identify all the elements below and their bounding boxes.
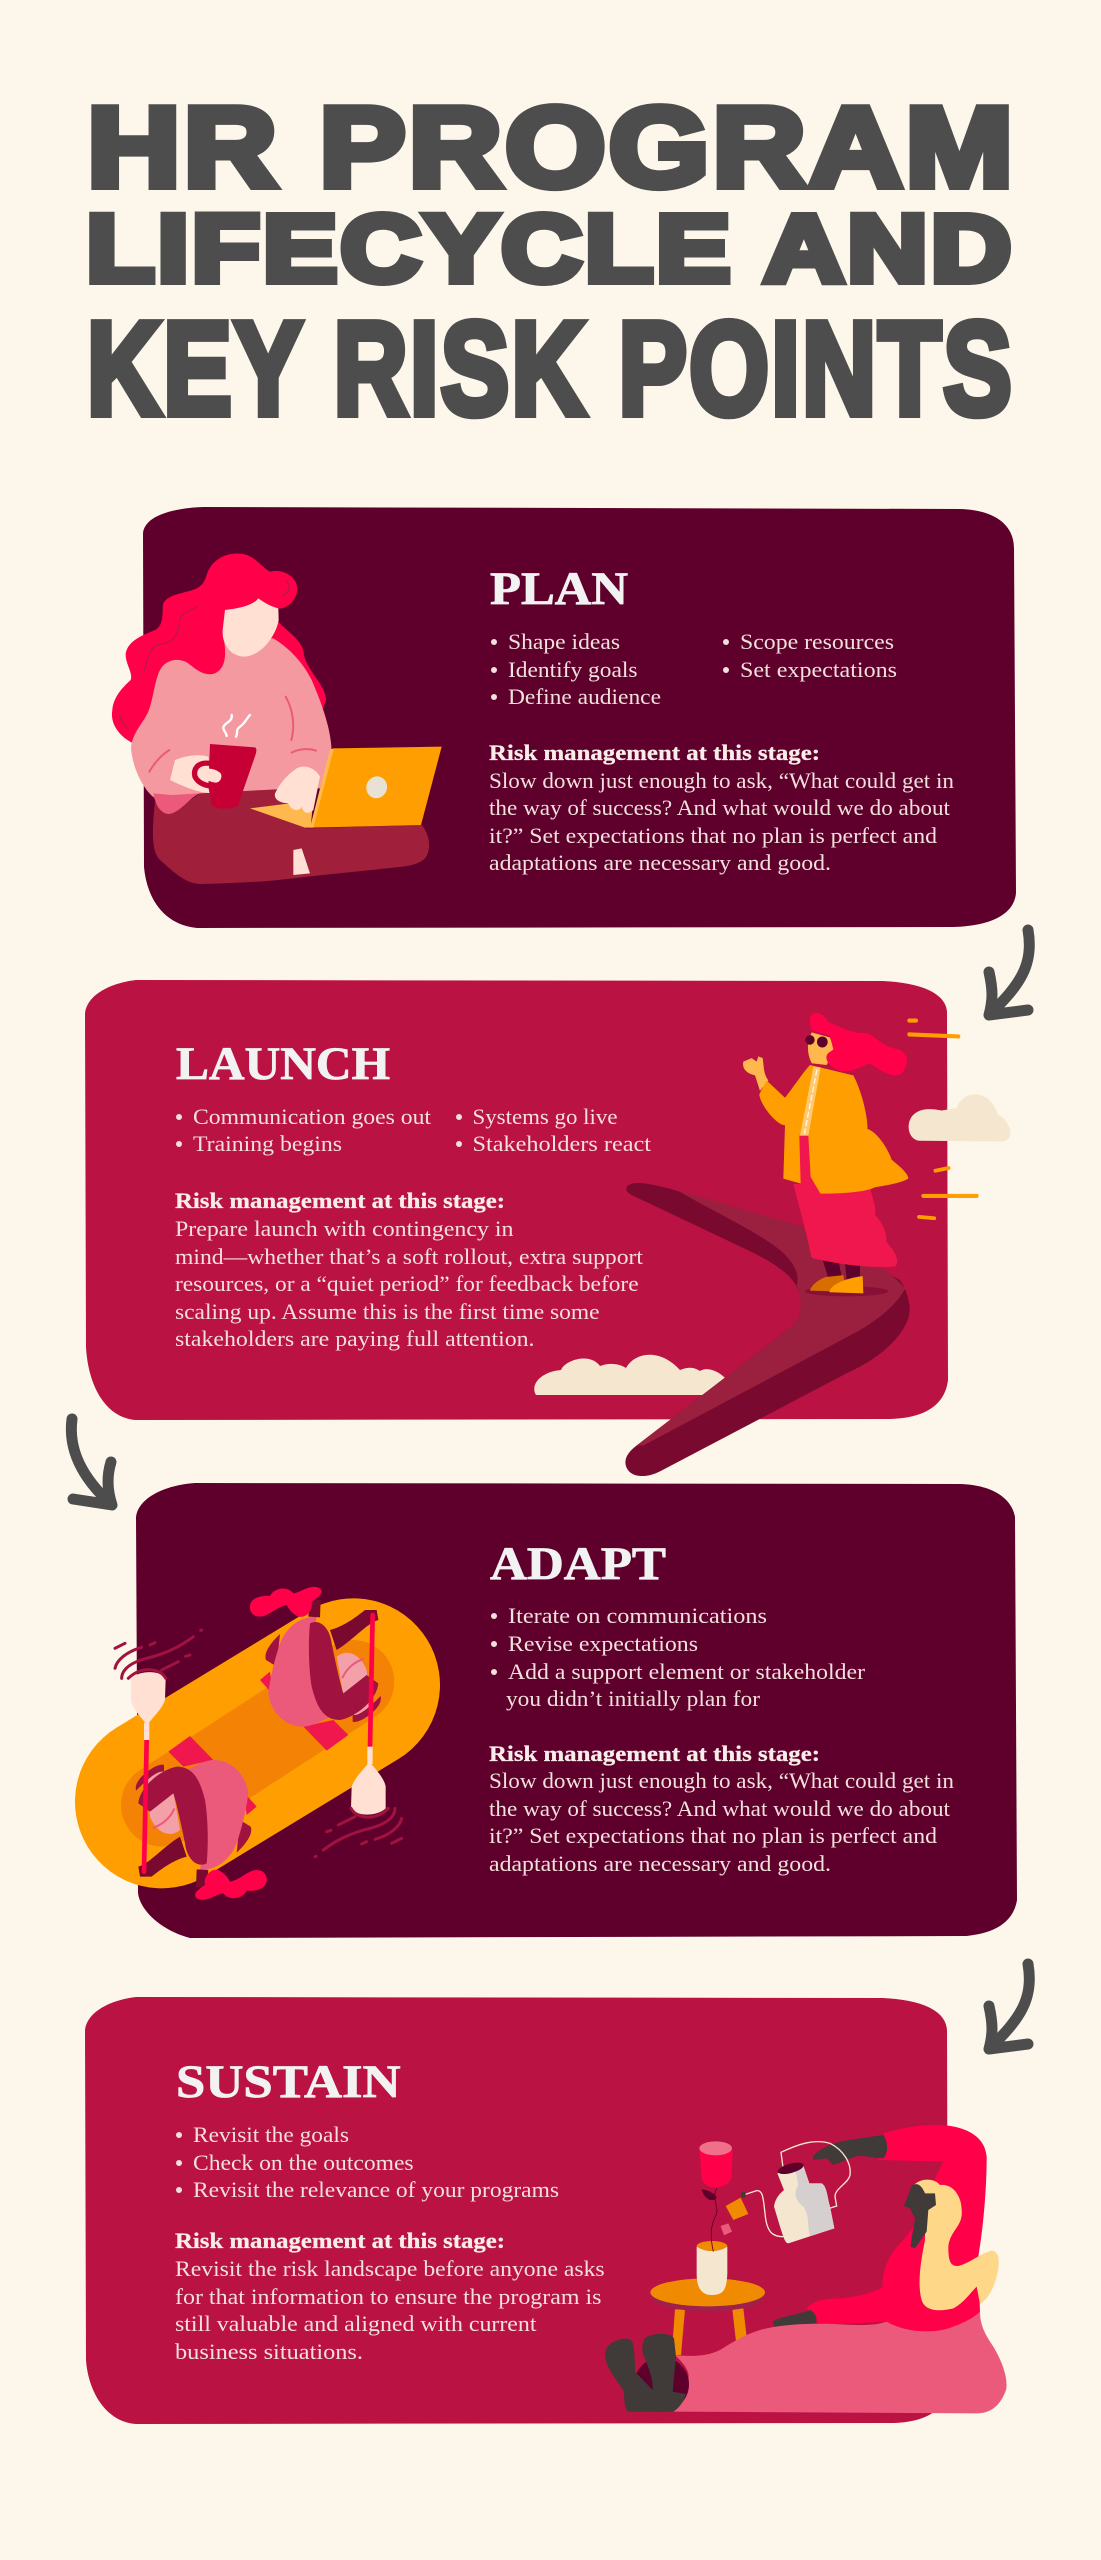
panel: plan	[112, 507, 1016, 928]
sustain bullet list: Check on the outcomes	[193, 2150, 414, 2175]
plan bullet list: Set expectations	[740, 657, 897, 682]
plan bullet list: Define audience	[508, 684, 661, 709]
plan panel background	[143, 507, 1016, 928]
arrow: plan to launch	[989, 930, 1029, 1015]
launch bullet list: Stakeholders react	[472, 1131, 651, 1156]
adapt risk management text: Slow down just enough to ask, “What could get in	[489, 1768, 954, 1793]
plan risk management text: Slow down just enough to ask, “What could get in	[489, 768, 954, 793]
launch bullet list: Systems go live	[472, 1104, 618, 1129]
sustain bullet list	[176, 2122, 559, 2202]
sustain risk management text	[175, 2228, 605, 2364]
launch risk management text: resources, or a “quiet period” for feedback before	[175, 1271, 639, 1296]
sustain risk management text: Revisit the risk landscape before anyone asks	[175, 2256, 605, 2281]
title: LIFECYCLE AND	[86, 196, 1014, 302]
icon: lower cloud	[534, 1355, 727, 1395]
launch heading: LAUNCH	[176, 1038, 390, 1090]
icon: two people paddling a raft	[115, 1587, 402, 1900]
plan bullet list: Shape ideas	[508, 629, 620, 654]
icon: woman on boomerang	[625, 1013, 910, 1476]
adapt bullet list: Iterate on communications	[508, 1603, 767, 1628]
arrow: launch to adapt	[71, 1419, 112, 1505]
sustain bullet list: Revisit the relevance of your programs	[193, 2177, 559, 2202]
title: HR PROGRAM	[87, 84, 1016, 210]
title	[86, 84, 1016, 442]
adapt risk management text: Risk management at this stage:	[489, 1741, 820, 1766]
sustain panel background	[85, 1997, 948, 2424]
icon: woman with laptop and mug	[112, 554, 442, 884]
launch bullet list: Communication goes out	[193, 1104, 431, 1129]
launch risk management text: scaling up. Assume this is the first time some	[175, 1299, 600, 1324]
sustain bullet list: Revisit the goals	[193, 2122, 349, 2147]
adapt heading: ADAPT	[490, 1538, 666, 1590]
icon: right cloud	[909, 1094, 1010, 1141]
launch risk management text: Prepare launch with contingency in	[175, 1216, 514, 1241]
launch risk management text	[175, 1188, 643, 1351]
plan bullet list	[491, 629, 897, 709]
launch risk management text: Risk management at this stage:	[175, 1188, 505, 1213]
plan risk management text: Risk management at this stage:	[489, 740, 820, 765]
adapt risk management text: the way of success? And what would we do about	[489, 1796, 950, 1821]
launch risk management text: mind—whether that’s a soft rollout, extra support	[175, 1244, 643, 1269]
icon: person relaxing and watering a flower	[605, 2125, 1007, 2413]
launch risk management text: stakeholders are paying full attention.	[175, 1326, 534, 1351]
plan risk management text: adaptations are necessary and good.	[489, 850, 831, 875]
launch bullet list	[176, 1104, 651, 1156]
launch panel background	[85, 980, 948, 1420]
plan risk management text: the way of success? And what would we do about	[489, 795, 950, 820]
adapt risk management text: adaptations are necessary and good.	[489, 1851, 831, 1876]
panel: launch	[85, 980, 1010, 1476]
adapt bullet list: Revise expectations	[508, 1631, 698, 1656]
adapt bullet list: Add a support element or stakeholder	[508, 1659, 866, 1684]
arrow: adapt to sustain	[989, 1964, 1029, 2049]
plan bullet list: Scope resources	[740, 629, 894, 654]
plan risk management text: it?” Set expectations that no plan is perfect and	[489, 823, 937, 848]
plan heading: PLAN	[490, 563, 628, 615]
panel: sustain	[85, 1997, 1007, 2424]
sustain risk management text: still valuable and aligned with current	[175, 2311, 536, 2336]
adapt bullet list: you didn’t initially plan for	[506, 1686, 761, 1711]
adapt bullet list	[491, 1603, 866, 1711]
sustain risk management text: business situations.	[175, 2339, 363, 2364]
sustain heading: SUSTAIN	[176, 2056, 401, 2108]
sustain risk management text: for that information to ensure the program is	[175, 2284, 602, 2309]
adapt panel background	[136, 1483, 1017, 1938]
launch bullet list: Training begins	[193, 1131, 342, 1156]
plan risk management text	[489, 740, 954, 875]
sustain risk management text: Risk management at this stage:	[175, 2228, 505, 2253]
icon: orange speed lines	[909, 1021, 977, 1218]
plan bullet list: Identify goals	[508, 657, 638, 682]
adapt risk management text: it?” Set expectations that no plan is perfect and	[489, 1823, 937, 1848]
adapt risk management text	[489, 1741, 954, 1876]
panel: adapt	[115, 1483, 1017, 1938]
